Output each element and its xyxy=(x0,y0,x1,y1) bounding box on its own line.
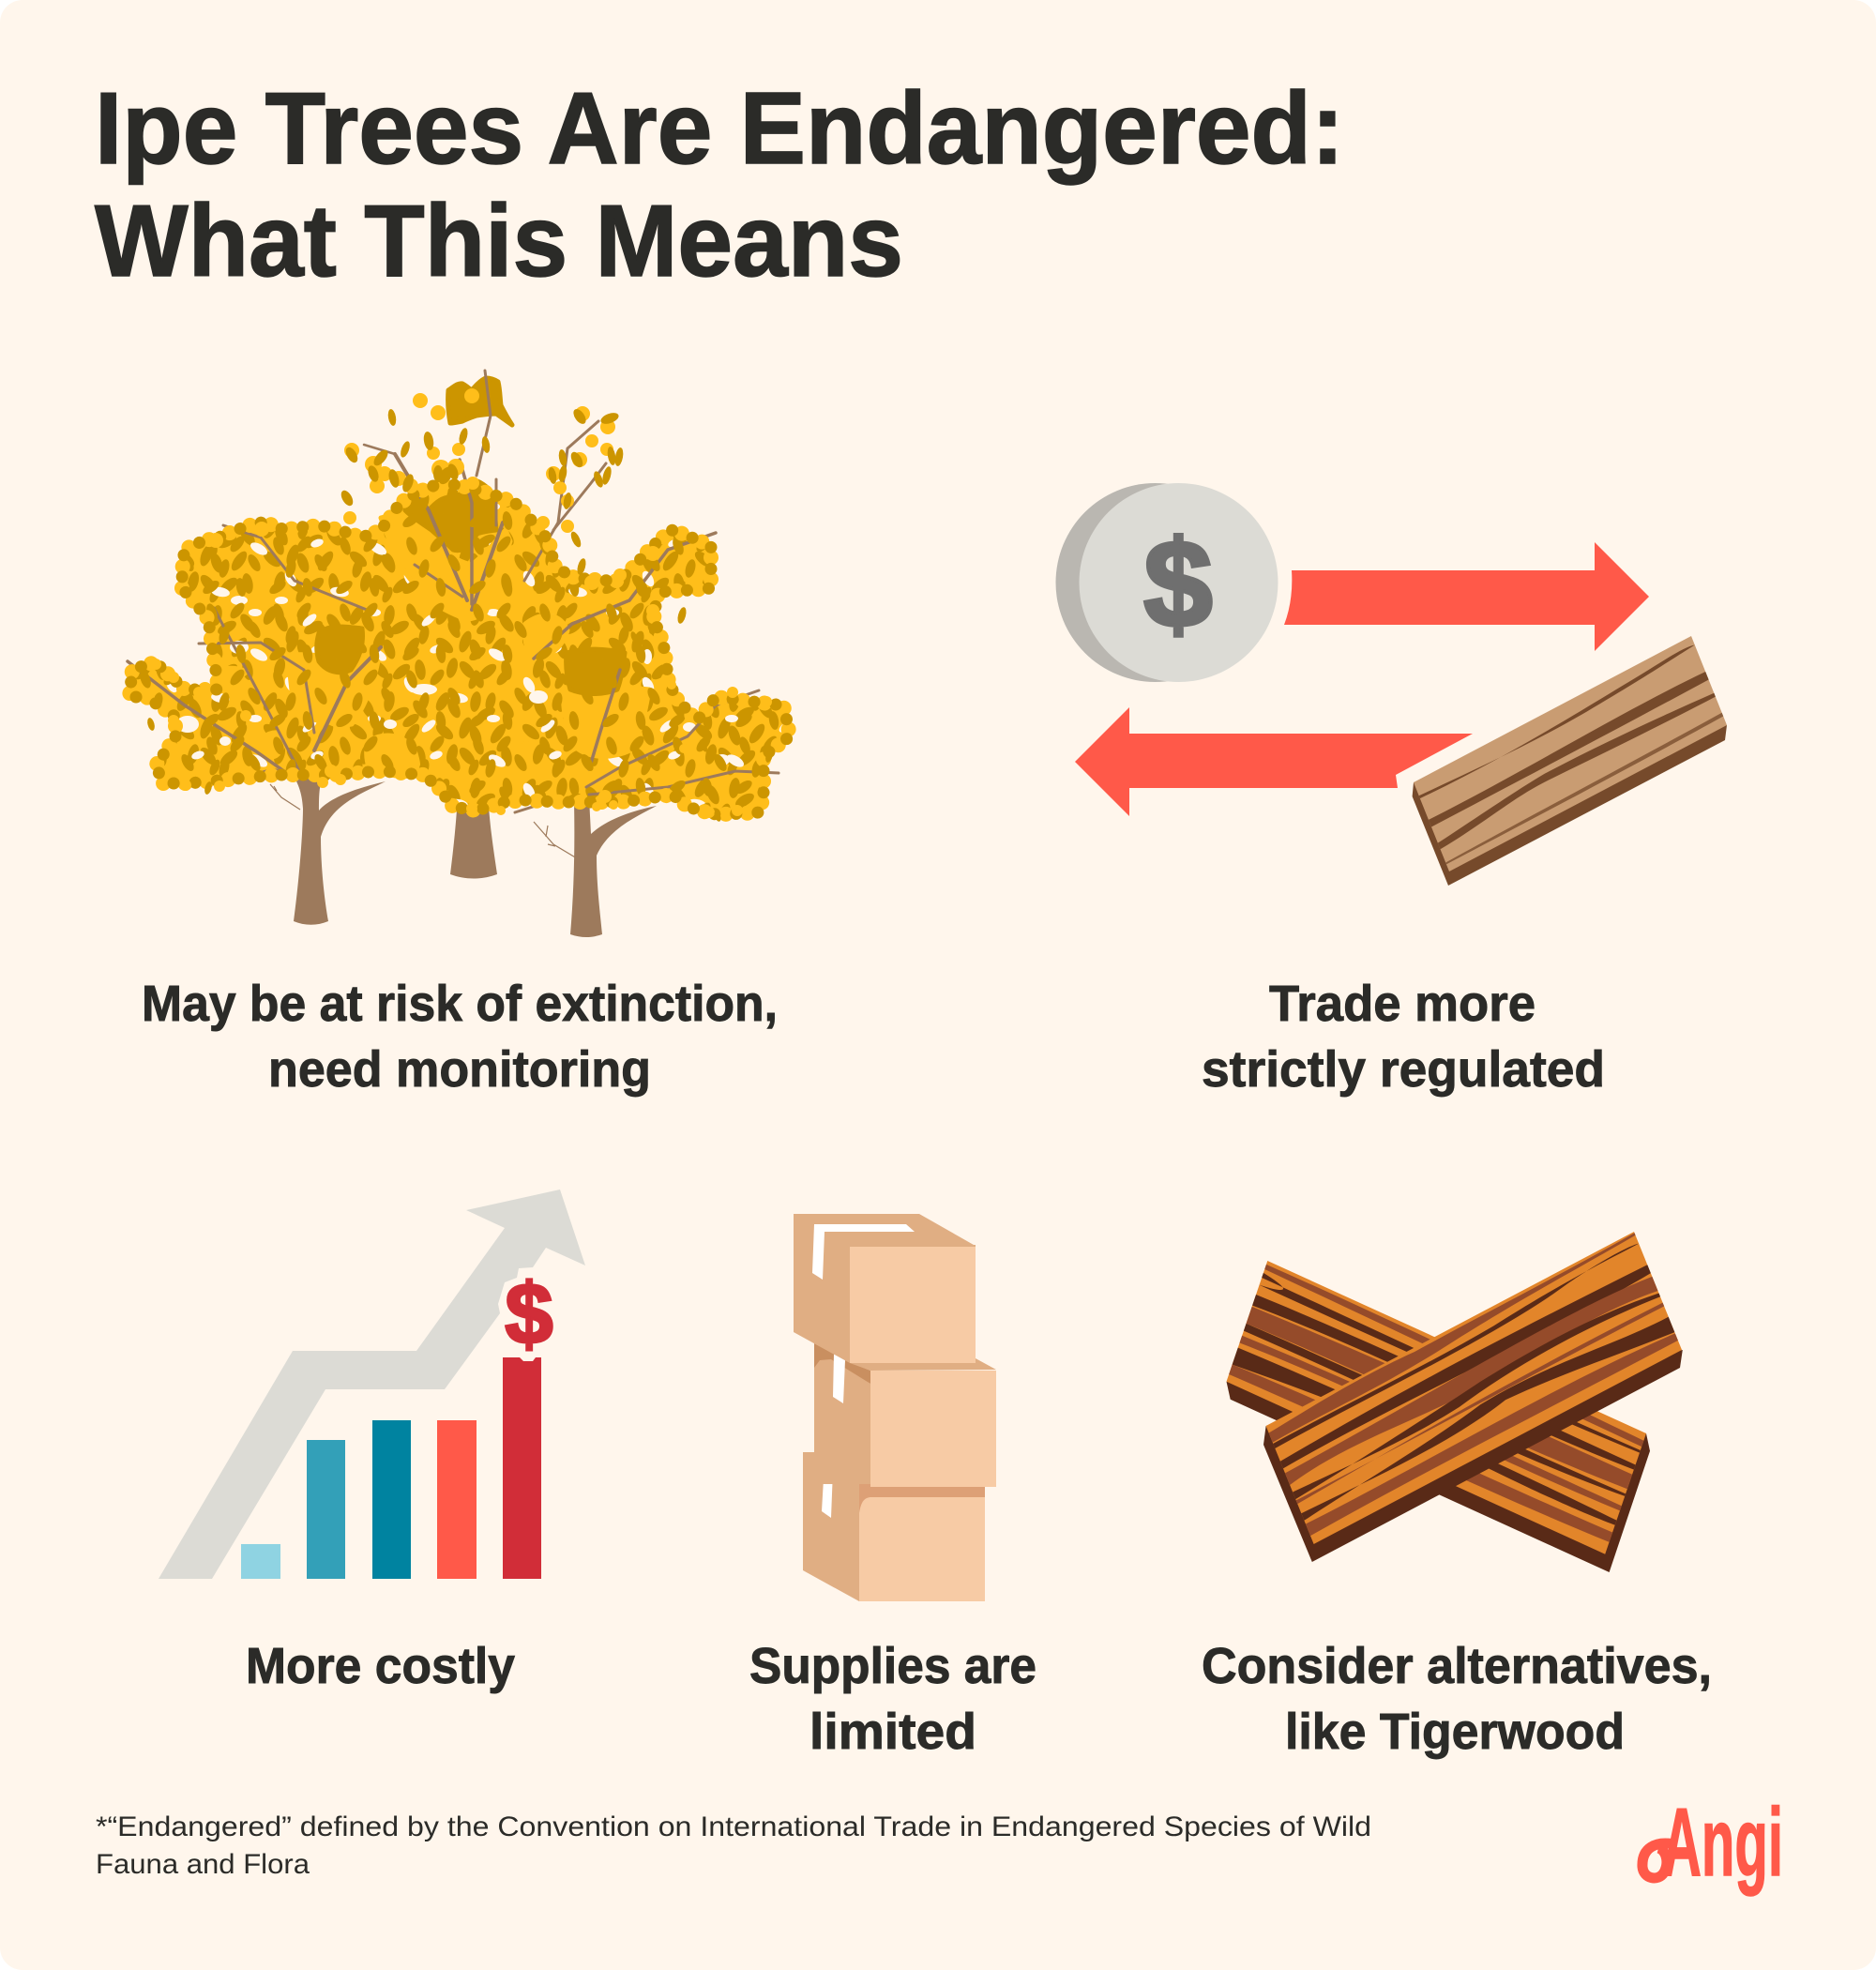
illustration: stacked boxes xyxy=(794,1214,996,1601)
logo: Angi: Angi xyxy=(1662,1788,1783,1896)
arrow: left xyxy=(1075,707,1473,816)
gaps between leaf clusters: large xyxy=(176,546,730,765)
label: consider alternatives xyxy=(1202,1638,1712,1760)
box: middle xyxy=(814,1343,996,1487)
title xyxy=(95,71,1344,298)
icon: coin xyxy=(1056,483,1278,682)
leaf texture: leaves over branches xyxy=(129,483,790,814)
loose dark leaves xyxy=(146,397,774,823)
label: consider alternatives: Consider alternatives, xyxy=(1202,1638,1712,1694)
box: bottom xyxy=(803,1452,985,1601)
illustration: ipe trees xyxy=(128,371,790,937)
title: What This Means xyxy=(95,184,903,298)
box: top xyxy=(794,1214,976,1363)
leaf texture: gold leaves xyxy=(129,483,790,814)
bar chart xyxy=(241,1357,541,1579)
icon: red dollar sign: $ xyxy=(505,1266,553,1362)
gaps between leaf clusters: repeating xyxy=(129,483,790,814)
solid leaf masses xyxy=(216,378,649,776)
label: consider alternatives: like Tigerwood xyxy=(1285,1704,1625,1760)
illustration: crossed tigerwood planks xyxy=(1227,1232,1683,1572)
label: trade regulated: Trade more xyxy=(1269,976,1536,1032)
branches xyxy=(128,371,779,812)
label: at risk of extinction: need monitoring xyxy=(268,1041,651,1098)
label: supplies limited: Supplies are xyxy=(749,1638,1036,1694)
label: trade regulated xyxy=(1202,976,1605,1098)
icon: coin: $ xyxy=(1143,515,1213,653)
label: at risk of extinction xyxy=(142,976,778,1098)
illustration: rising cost chart xyxy=(159,1190,585,1579)
plank: front xyxy=(1263,1232,1683,1562)
title: Ipe Trees Are Endangered: xyxy=(95,71,1344,186)
scalloped leaf edge: yellow xyxy=(129,483,790,814)
footnote: *“Endangered” defined by the Convention on International Trade in Endangered Species of Wild xyxy=(96,1811,1371,1842)
scalloped leaf edge: gold xyxy=(129,483,790,814)
footnote xyxy=(96,1811,1371,1880)
illustration: trade coin and plank xyxy=(1056,483,1727,886)
arrow: right xyxy=(1284,542,1649,651)
logo: Angi xyxy=(1642,1788,1783,1896)
tree trunks xyxy=(291,675,657,937)
loose yellow leaves xyxy=(150,388,772,818)
twig details xyxy=(270,784,577,858)
arrow: rising trend xyxy=(159,1190,585,1579)
label: supplies limited: limited xyxy=(809,1704,976,1760)
leaf base: crown fill xyxy=(129,483,790,814)
icon: plank xyxy=(1413,636,1727,886)
label: trade regulated: strictly regulated xyxy=(1202,1041,1605,1098)
footnote: Fauna and Flora xyxy=(96,1849,310,1880)
label: at risk of extinction: May be at risk of extinction, xyxy=(142,976,778,1032)
label: supplies limited xyxy=(749,1638,1036,1760)
label: more costly: More costly xyxy=(246,1638,515,1694)
plank: back xyxy=(1227,1261,1650,1572)
